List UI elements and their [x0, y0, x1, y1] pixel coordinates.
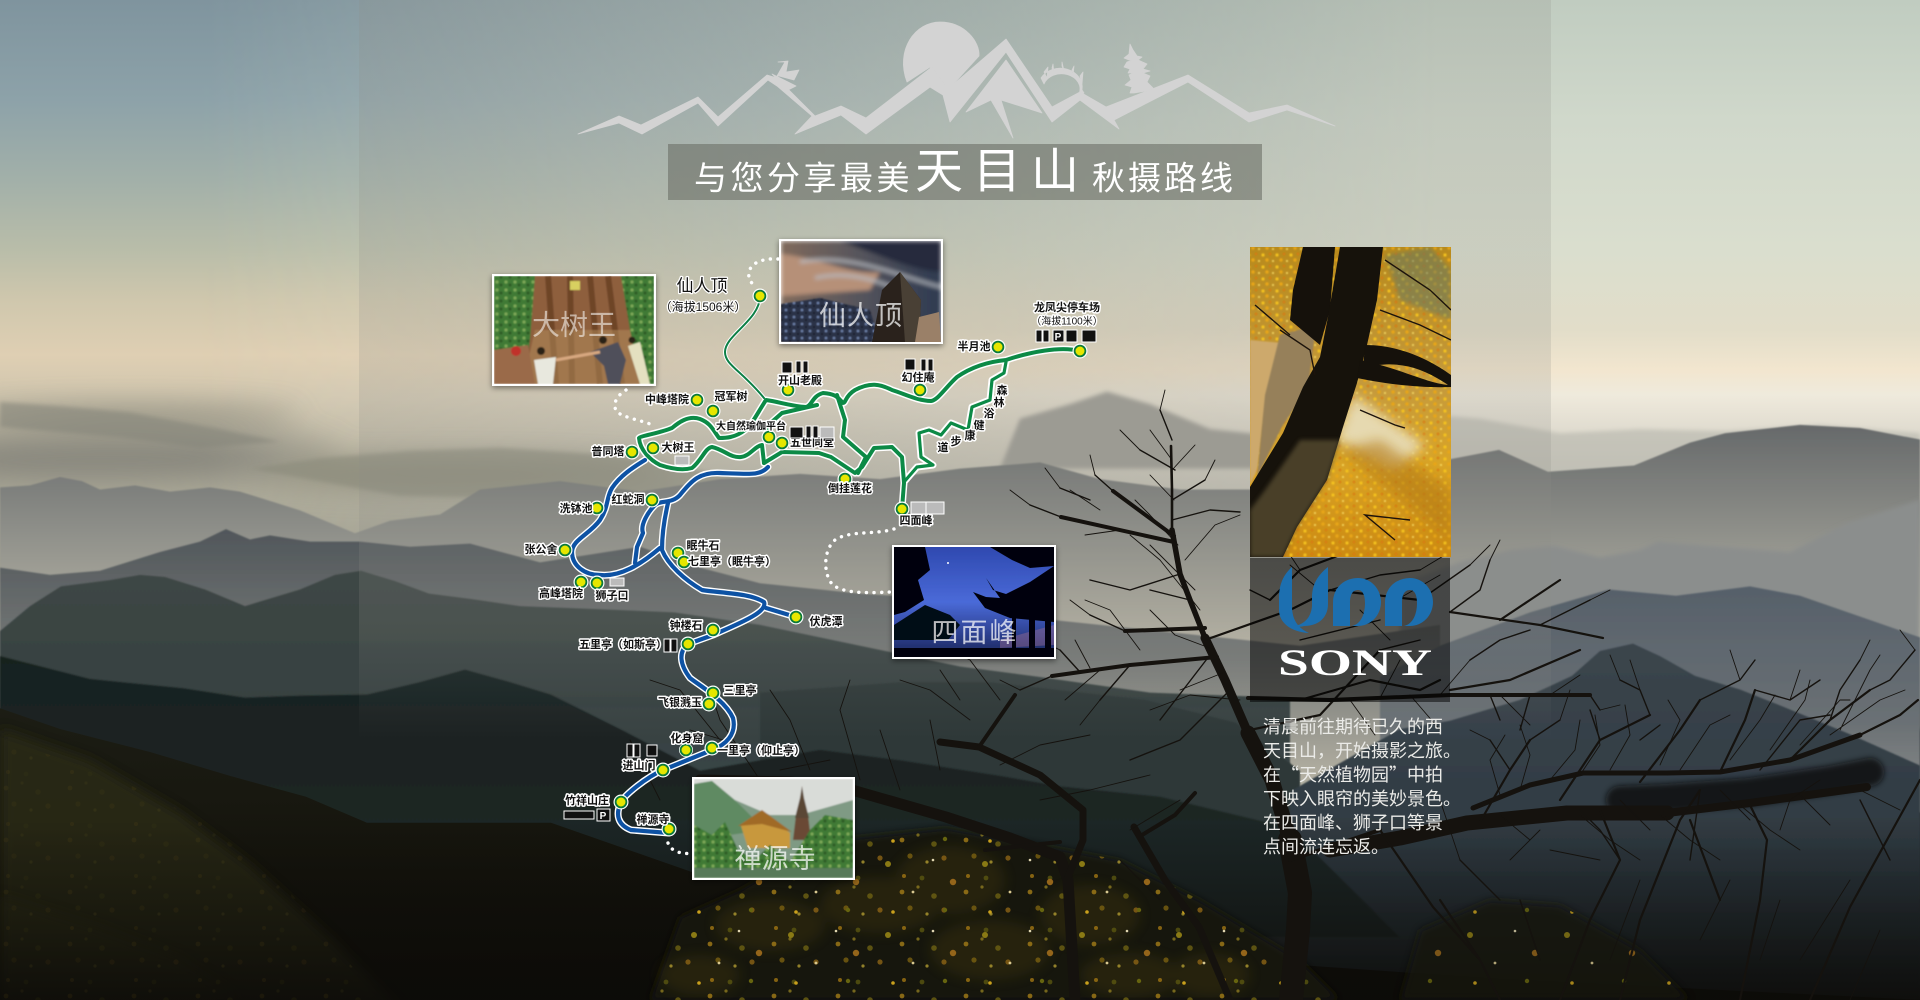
map labels: 五里亭（如斯亭）: [579, 637, 667, 651]
autumn tree photo: [1250, 247, 1451, 557]
title bar: [668, 144, 1262, 200]
map labels: 浴: [984, 407, 994, 420]
description text: 天目山，开始摄影之旅。: [1263, 737, 1461, 763]
map labels: 普同塔: [592, 444, 624, 458]
logo sun: [903, 22, 979, 90]
map labels: （海拔1100米）: [1031, 314, 1103, 328]
description text: 下映入眼帘的美妙景色。: [1263, 785, 1461, 811]
map labels: 高峰塔院: [539, 586, 583, 600]
map labels: 仙人顶: [676, 276, 728, 296]
map labels: 森: [996, 383, 1008, 397]
description text: 点间流连忘返。: [1263, 833, 1389, 859]
map labels: 四面峰: [900, 513, 932, 527]
map labels: 七里亭（眠牛亭）: [688, 554, 776, 568]
map labels: 张公舍: [524, 542, 558, 556]
map labels: 幻住庵: [902, 370, 934, 384]
logo pagoda: [1124, 44, 1153, 93]
photo title: 仙人顶: [819, 301, 903, 331]
blue routes: [572, 460, 796, 833]
parking letters: P: [600, 811, 607, 822]
thin route to 仙人顶: [725, 296, 764, 398]
map labels: 钟楼石: [670, 618, 702, 632]
map labels: 化身窟: [670, 731, 704, 745]
description text: 在“天然植物园”中拍: [1263, 761, 1443, 787]
photo: 禅源寺: [692, 777, 855, 880]
map labels: 康: [964, 428, 976, 442]
photo title: 禅源寺: [734, 844, 816, 874]
map labels: 飞银溅玉: [658, 695, 702, 709]
parking letters: [600, 332, 1062, 822]
parking letters: P: [1055, 332, 1062, 343]
title text: 秋摄路线: [1092, 160, 1236, 196]
description text: [1263, 713, 1461, 859]
description text: 在四面峰、狮子口等景: [1263, 809, 1443, 835]
map labels: 林: [994, 395, 1004, 409]
bare tree branches: [630, 390, 1920, 1000]
lighter central panel: [359, 0, 1551, 1000]
photo title: 四面峰: [932, 618, 1018, 648]
photo: 大树王: [492, 274, 656, 386]
green routes: [639, 349, 1080, 509]
mountain logo: [578, 22, 1335, 138]
map labels: [524, 276, 1103, 826]
logo bird roof: [772, 61, 799, 90]
sponsor logo box: [1250, 558, 1450, 702]
map labels: 倒挂莲花: [828, 481, 872, 495]
title text: 与您分享最美: [694, 160, 913, 196]
map labels: 大自然瑜伽平台: [716, 420, 786, 432]
map labels: 三里亭: [724, 683, 756, 697]
logo bridge: [1041, 62, 1084, 94]
SONY wordmark: SONY: [1278, 643, 1432, 684]
map labels: 伏虎潭: [810, 614, 842, 628]
UPP logo: [1279, 567, 1433, 633]
map labels: 健: [974, 418, 984, 432]
map labels: 一里亭（仰止亭）: [717, 743, 805, 757]
route halo: [572, 349, 1080, 833]
photo: 四面峰: [892, 545, 1056, 659]
photo title: 大树王: [532, 310, 616, 340]
map labels: 进山门: [622, 758, 656, 772]
route map: [572, 296, 1080, 833]
map nodes: [558, 288, 1088, 836]
map labels: 红蛇洞: [612, 492, 644, 506]
logo inner peak: [966, 60, 1042, 138]
map labels: 眠牛石: [686, 538, 720, 552]
map labels: 步: [950, 434, 962, 448]
map labels: 半月池: [958, 339, 990, 353]
map labels: 中峰塔院: [645, 392, 689, 406]
photo: 仙人顶: [779, 239, 943, 344]
description text: 清晨前往期待已久的西: [1263, 713, 1443, 739]
title text: 天目山: [915, 146, 1089, 198]
map labels: 道: [938, 440, 948, 454]
map labels: 五世同堂: [790, 435, 834, 449]
logo mountain ridge: [578, 39, 1335, 134]
map labels: 龙凤尖停车场: [1034, 300, 1100, 314]
map labels: （海拔1506米）: [660, 299, 746, 314]
title text: [694, 146, 1236, 198]
map labels: 竹祥山庄: [565, 793, 609, 807]
map dotted connectors: [615, 259, 894, 853]
map facility icons: [564, 330, 1096, 822]
map labels: 大树王: [662, 440, 694, 454]
map labels: 狮子口: [596, 589, 628, 602]
map labels: 开山老殿: [778, 373, 822, 387]
map labels: 冠军树: [714, 389, 748, 403]
map labels: 洗钵池: [560, 501, 592, 515]
map labels: 禅源寺: [636, 812, 670, 826]
